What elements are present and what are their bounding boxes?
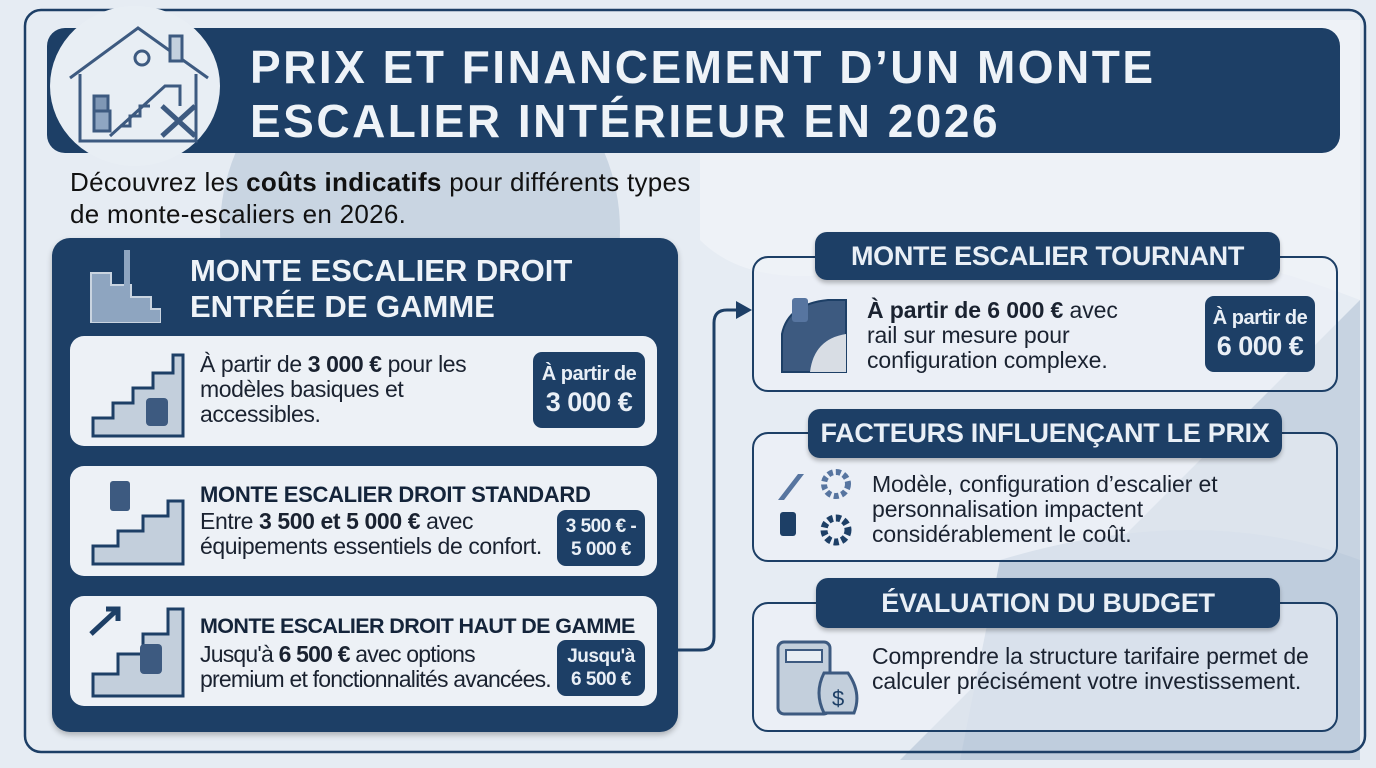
text (872, 471, 1218, 547)
badge (1205, 296, 1315, 372)
icon: calculator and money bag (776, 640, 858, 716)
subtitle: Découvrez les coûts indicatifs pour différents types (70, 167, 691, 197)
text: accessibles. (200, 401, 320, 427)
text (867, 297, 1118, 373)
text: MONTE ESCALIER DROIT STANDARD (200, 482, 591, 507)
text (872, 643, 1309, 694)
panel heading (190, 253, 572, 324)
icon: stairs header (90, 250, 161, 323)
icon: stairs with arrow (89, 606, 184, 698)
heading pill: budget: ÉVALUATION DU BUDGET (881, 588, 1215, 618)
badge: 3 500 € - (566, 516, 636, 537)
badge: 3 000 € (546, 387, 632, 417)
heading pill: factors (808, 409, 1282, 458)
badge (533, 352, 645, 428)
text: Comprendre la structure tarifaire permet de (872, 643, 1309, 669)
icon: house with stairlift (50, 6, 220, 166)
icon: stairs standard (92, 481, 184, 566)
card: standard: équipements essentiels de confort. (200, 533, 542, 559)
title: ESCALIER INTÉRIEUR EN 2026 (250, 95, 1000, 147)
panel: factors (752, 432, 1338, 562)
badge: À partir de (542, 363, 636, 385)
panel: budget (752, 602, 1338, 732)
panel heading: ENTRÉE DE GAMME (190, 289, 495, 324)
panel: straight stairlifts (52, 238, 678, 732)
icon: calculator and money bag: $ (832, 686, 844, 711)
icon: gears (778, 469, 852, 546)
text: calculer précisément votre investissement. (872, 668, 1301, 694)
title bar (47, 28, 1340, 153)
text: considérablement le coût. (872, 521, 1132, 547)
subtitle: de monte-escaliers en 2026. (70, 199, 406, 229)
text: À partir de 3 000 € pour les (200, 351, 466, 377)
text: rail sur mesure pour (867, 322, 1070, 348)
icon: stairs with chair (92, 354, 184, 438)
card: high end: Jusqu'à 6 500 € avec options (200, 641, 475, 667)
badge (557, 640, 645, 696)
badge: 5 000 € (571, 539, 631, 560)
badge: Jusqu'à (567, 646, 635, 667)
badge: 6 500 € (571, 669, 631, 690)
title (250, 41, 1156, 147)
badge: 6 000 € (1217, 331, 1303, 361)
title: PRIX ET FINANCEMENT D’UN MONTE (250, 41, 1156, 93)
card: high end (70, 596, 657, 706)
text: À partir de 6 000 € avec (867, 297, 1118, 323)
panel: tournant (752, 256, 1338, 392)
text: configuration complexe. (867, 347, 1108, 373)
panel heading: MONTE ESCALIER DROIT (190, 253, 572, 288)
heading pill: factors: FACTEURS INFLUENÇANT LE PRIX (820, 418, 1270, 448)
icon: curved stairs (781, 298, 847, 373)
card: standard (70, 466, 657, 576)
badge: À partir de (1213, 307, 1307, 329)
text: MONTE ESCALIER DROIT HAUT DE GAMME (200, 614, 635, 638)
card: standard: Entre 3 500 et 5 000 € avec (200, 508, 473, 534)
text: Modèle, configuration d’escalier et (872, 471, 1218, 497)
heading pill: tournant: MONTE ESCALIER TOURNANT (851, 241, 1244, 271)
heading pill: budget (816, 578, 1280, 628)
text (200, 351, 466, 427)
text: personnalisation impactent (872, 496, 1143, 522)
card: high end: premium et fonctionnalités avancées. (200, 666, 551, 692)
arrow: connector (678, 301, 752, 652)
card: entry level (70, 336, 657, 446)
subtitle (70, 167, 691, 229)
text: modèles basiques et (200, 376, 403, 402)
heading pill: tournant (815, 232, 1280, 280)
badge (557, 510, 645, 566)
